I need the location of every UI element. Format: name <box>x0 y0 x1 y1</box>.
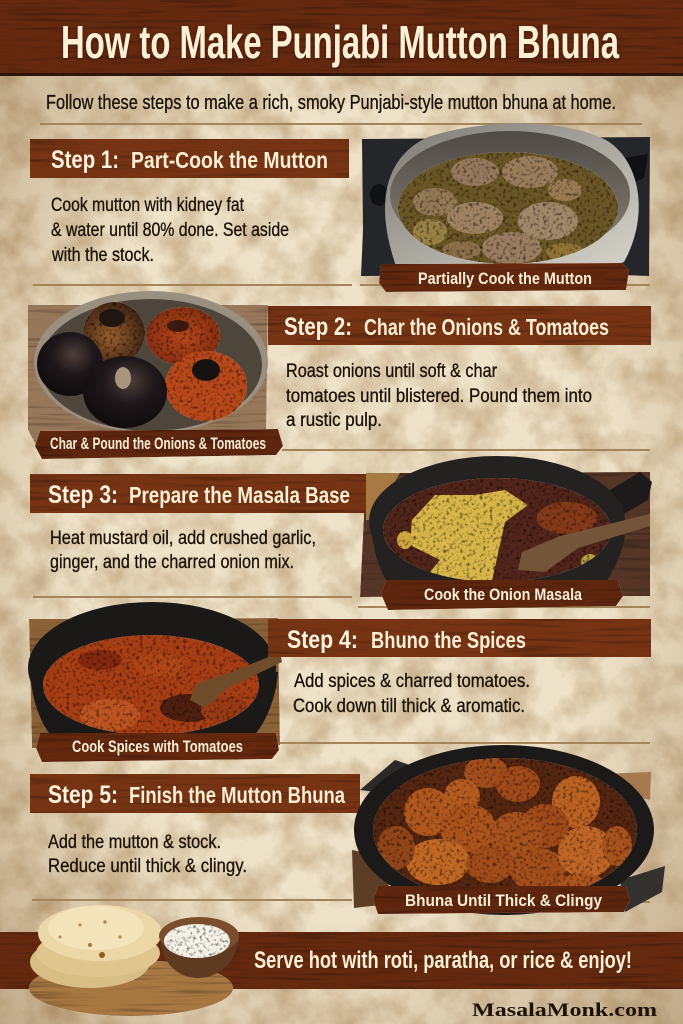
heading: step 2: Step 2: <box>284 313 352 341</box>
text: step 5 <box>48 832 247 877</box>
text: step 1: & water until 80% done. Set aside <box>51 220 289 241</box>
text: step 2: a rustic pulp. <box>286 410 382 431</box>
caption: step 1 <box>379 263 629 292</box>
caption: step 2: Char & Pound the Onions & Tomatoes <box>50 435 266 453</box>
photo: finished mutton bhuna <box>352 745 665 915</box>
caption: step 5: Bhuna Until Thick & Clingy <box>405 892 603 910</box>
text: step 4: Cook down till thick & aromatic. <box>293 696 525 717</box>
caption: step 3 <box>381 580 623 610</box>
text: step 4: Add spices & charred tomatoes. <box>294 671 530 692</box>
credit: MasalaMonk.com <box>472 1000 657 1021</box>
text: step 3: ginger, and the charred onion mix. <box>50 552 294 573</box>
heading: step 4: Step 4: <box>287 626 358 654</box>
footer banner <box>0 932 683 989</box>
text: step 3 <box>50 528 316 573</box>
photo: spices cooked with tomatoes <box>28 602 282 748</box>
icon: roti, rice bowl and wooden board <box>29 905 239 1016</box>
caption: step 4 <box>36 733 279 762</box>
text: step 3: Heat mustard oil, add crushed garlic, <box>50 528 316 549</box>
text: step 5: Add the mutton & stock. <box>48 832 221 853</box>
heading: step 3: Step 3: <box>48 481 118 509</box>
photo: pressure cooker with mutton <box>361 123 650 276</box>
heading: step 1 <box>30 139 349 178</box>
text: step 4 <box>293 671 530 717</box>
text: step 1 <box>51 195 289 266</box>
caption: step 2 <box>35 429 283 459</box>
panel: step 4 <box>28 602 651 762</box>
text: step 2: tomatoes until blistered. Pound them into <box>286 386 592 407</box>
caption: step 5 <box>373 886 630 914</box>
title banner <box>0 0 683 76</box>
caption: step 4: Cook Spices with Tomatoes <box>72 738 243 756</box>
text: step 1: with the stock. <box>51 245 154 266</box>
photo: onion masala in pan <box>360 456 652 597</box>
heading: step 5: Finish the Mutton Bhuna <box>129 782 345 808</box>
heading: step 2: Char the Onions & Tomatoes <box>364 314 609 340</box>
panel: step 5 <box>30 745 665 915</box>
heading: step 4 <box>268 619 651 657</box>
heading: step 2 <box>268 306 651 345</box>
caption: step 1: Partially Cook the Mutton <box>418 270 592 288</box>
heading: step 5: Step 5: <box>48 781 118 809</box>
text: step 5: Reduce until thick & clingy. <box>48 856 247 877</box>
panel: step 1 <box>30 123 650 292</box>
photo: charred onions and tomatoes <box>28 291 268 445</box>
text: step 2: Roast onions until soft & char <box>286 361 498 382</box>
panel: step 2 <box>28 291 651 459</box>
caption: step 3: Cook the Onion Masala <box>424 586 583 604</box>
heading: step 1: Part-Cook the Mutton <box>131 147 328 173</box>
heading: step 4: Bhuno the Spices <box>371 627 526 653</box>
heading: step 3 <box>30 474 366 513</box>
text: step 2 <box>286 361 592 431</box>
panel: step 3 <box>30 456 652 610</box>
text: step 1: Cook mutton with kidney fat <box>51 195 245 216</box>
heading: step 1: Step 1: <box>51 146 119 174</box>
heading: step 3: Prepare the Masala Base <box>129 482 350 508</box>
heading: step 5 <box>30 774 360 813</box>
